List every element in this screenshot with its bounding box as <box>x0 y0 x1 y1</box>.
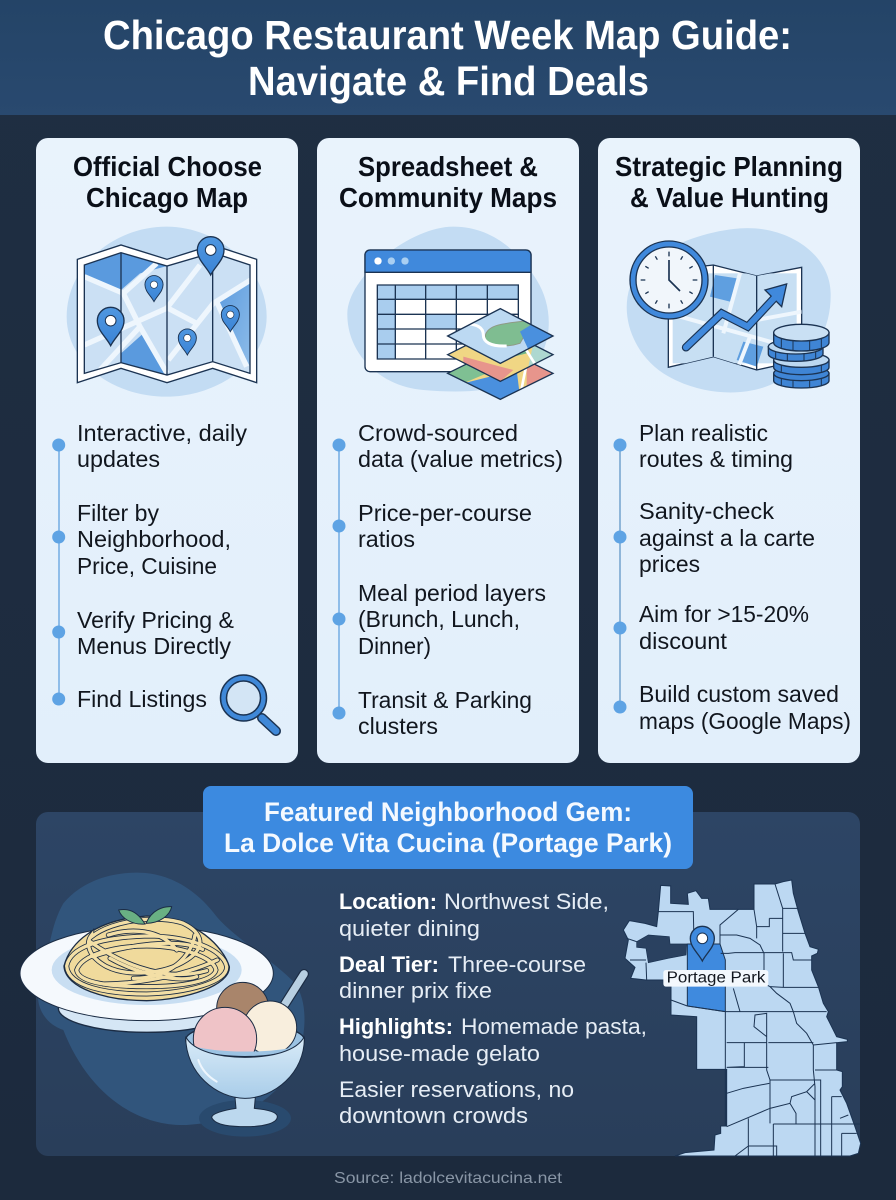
heading: official map: Official Choose <box>73 151 262 182</box>
map layer top <box>448 309 553 363</box>
list: strategic tips: discount <box>639 628 727 654</box>
list: spreadsheet features: Dinner) <box>358 633 431 659</box>
detail: reservations <box>339 1077 574 1128</box>
detail: highlights: Highlights: <box>339 1014 453 1039</box>
banner: featured neighborhood gem <box>203 786 693 869</box>
list: spreadsheet features: Transit & Parking <box>358 687 532 713</box>
list: official map features <box>77 420 247 712</box>
list: spreadsheet features: data (value metrics) <box>358 446 563 472</box>
detail: reservations: Easier reservations, no <box>339 1077 574 1102</box>
list: spreadsheet features: clusters <box>358 713 438 739</box>
list: strategic tips: routes & timing <box>639 446 793 472</box>
label: Portage Park: Portage Park <box>667 969 766 986</box>
list: strategic tips: maps (Google Maps) <box>639 708 851 734</box>
timeline: strategic <box>614 438 626 714</box>
detail: location: Location: <box>339 889 437 914</box>
detail: deal tier: dinner prix fixe <box>339 978 492 1003</box>
gelato bowl <box>186 974 304 1127</box>
detail: deal tier: Deal Tier: <box>339 952 439 977</box>
clock <box>630 241 708 319</box>
list: strategic tips: Sanity-check <box>639 498 774 524</box>
list: spreadsheet features: Crowd-sourced <box>358 420 518 446</box>
source line: Source: ladolcevitacucina.net <box>334 1170 563 1187</box>
list: official map features: Filter by <box>77 500 159 526</box>
detail: highlights <box>339 1014 647 1066</box>
list: official map features: Menus Directly <box>77 633 231 659</box>
pasta <box>64 916 229 1001</box>
list: spreadsheet features: (Brunch, Lunch, <box>358 606 520 632</box>
list: strategic tips <box>639 420 851 734</box>
detail: location: quieter dining <box>339 916 480 941</box>
detail: deal tier: Three-course <box>448 952 586 977</box>
detail: location <box>339 889 609 941</box>
timeline: official map <box>52 438 65 706</box>
heading: official map: Chicago Map <box>86 182 248 213</box>
basil leaves <box>119 907 172 924</box>
title <box>103 12 792 104</box>
heading: strategic planning <box>615 151 843 213</box>
heading: strategic planning: & Value Hunting <box>630 182 829 213</box>
trend arrow <box>686 284 787 347</box>
detail: highlights: house-made gelato <box>339 1041 540 1066</box>
panel: strategic planning and value hunting <box>598 138 860 763</box>
title: Navigate & Find Deals <box>248 58 649 104</box>
list: official map features: updates <box>77 446 160 472</box>
icon: location pin <box>690 926 714 961</box>
icon: spreadsheet with map layers <box>347 227 553 399</box>
coins <box>768 324 829 388</box>
heading: spreadsheet: Spreadsheet & <box>358 151 538 182</box>
list: official map features: Neighborhood, <box>77 526 231 552</box>
plate <box>20 926 273 1032</box>
list: strategic tips: Aim for >15-20% <box>639 601 809 627</box>
map layer middle <box>446 346 554 382</box>
list: spreadsheet features: Price-per-course <box>358 500 532 526</box>
icon: clock, map, trend arrow and coins <box>627 228 831 392</box>
list: strategic tips: Build custom saved <box>639 681 839 707</box>
list: official map features: Find Listings <box>77 686 207 712</box>
list: strategic tips: against a la carte <box>639 525 815 551</box>
heading: spreadsheet <box>339 151 557 213</box>
icon: magnifying glass <box>220 675 276 731</box>
title: Chicago Restaurant Week Map Guide: <box>103 12 792 58</box>
detail: deal tier <box>339 952 586 1003</box>
list: spreadsheet features: Meal period layers <box>358 580 546 606</box>
list: official map features: Verify Pricing & <box>77 607 234 633</box>
heading: official map <box>73 151 262 213</box>
list: strategic tips: prices <box>639 551 700 577</box>
icon: folded map with pins <box>67 227 267 397</box>
detail: highlights: Homemade pasta, <box>461 1014 647 1039</box>
header band <box>0 0 896 115</box>
text block: restaurant details <box>339 889 647 1128</box>
detail: location: Northwest Side, <box>444 889 609 914</box>
map: chicago neighborhoods with Portage Park highlighted <box>623 880 861 1156</box>
panel: spreadsheet and community maps <box>317 138 579 763</box>
panel: official choose chicago map <box>36 138 298 763</box>
list: spreadsheet features <box>358 420 563 739</box>
banner: featured neighborhood gem: Featured Neighborhood Gem: <box>264 797 632 827</box>
list: official map features: Price, Cuisine <box>77 553 217 579</box>
banner: featured neighborhood gem: La Dolce Vita Cucina (Portage Park) <box>224 828 672 858</box>
timeline: spreadsheet <box>332 438 346 720</box>
detail: reservations: downtown crowds <box>339 1103 528 1128</box>
map layer bottom <box>446 364 554 400</box>
list: official map features: Interactive, daily <box>77 420 247 446</box>
list: strategic tips: Plan realistic <box>639 420 768 446</box>
illustration: pasta and gelato <box>20 873 305 1137</box>
heading: strategic planning: Strategic Planning <box>615 151 843 182</box>
panel: featured neighborhood gem <box>20 812 861 1156</box>
heading: spreadsheet: Community Maps <box>339 182 557 213</box>
list: spreadsheet features: ratios <box>358 526 415 552</box>
